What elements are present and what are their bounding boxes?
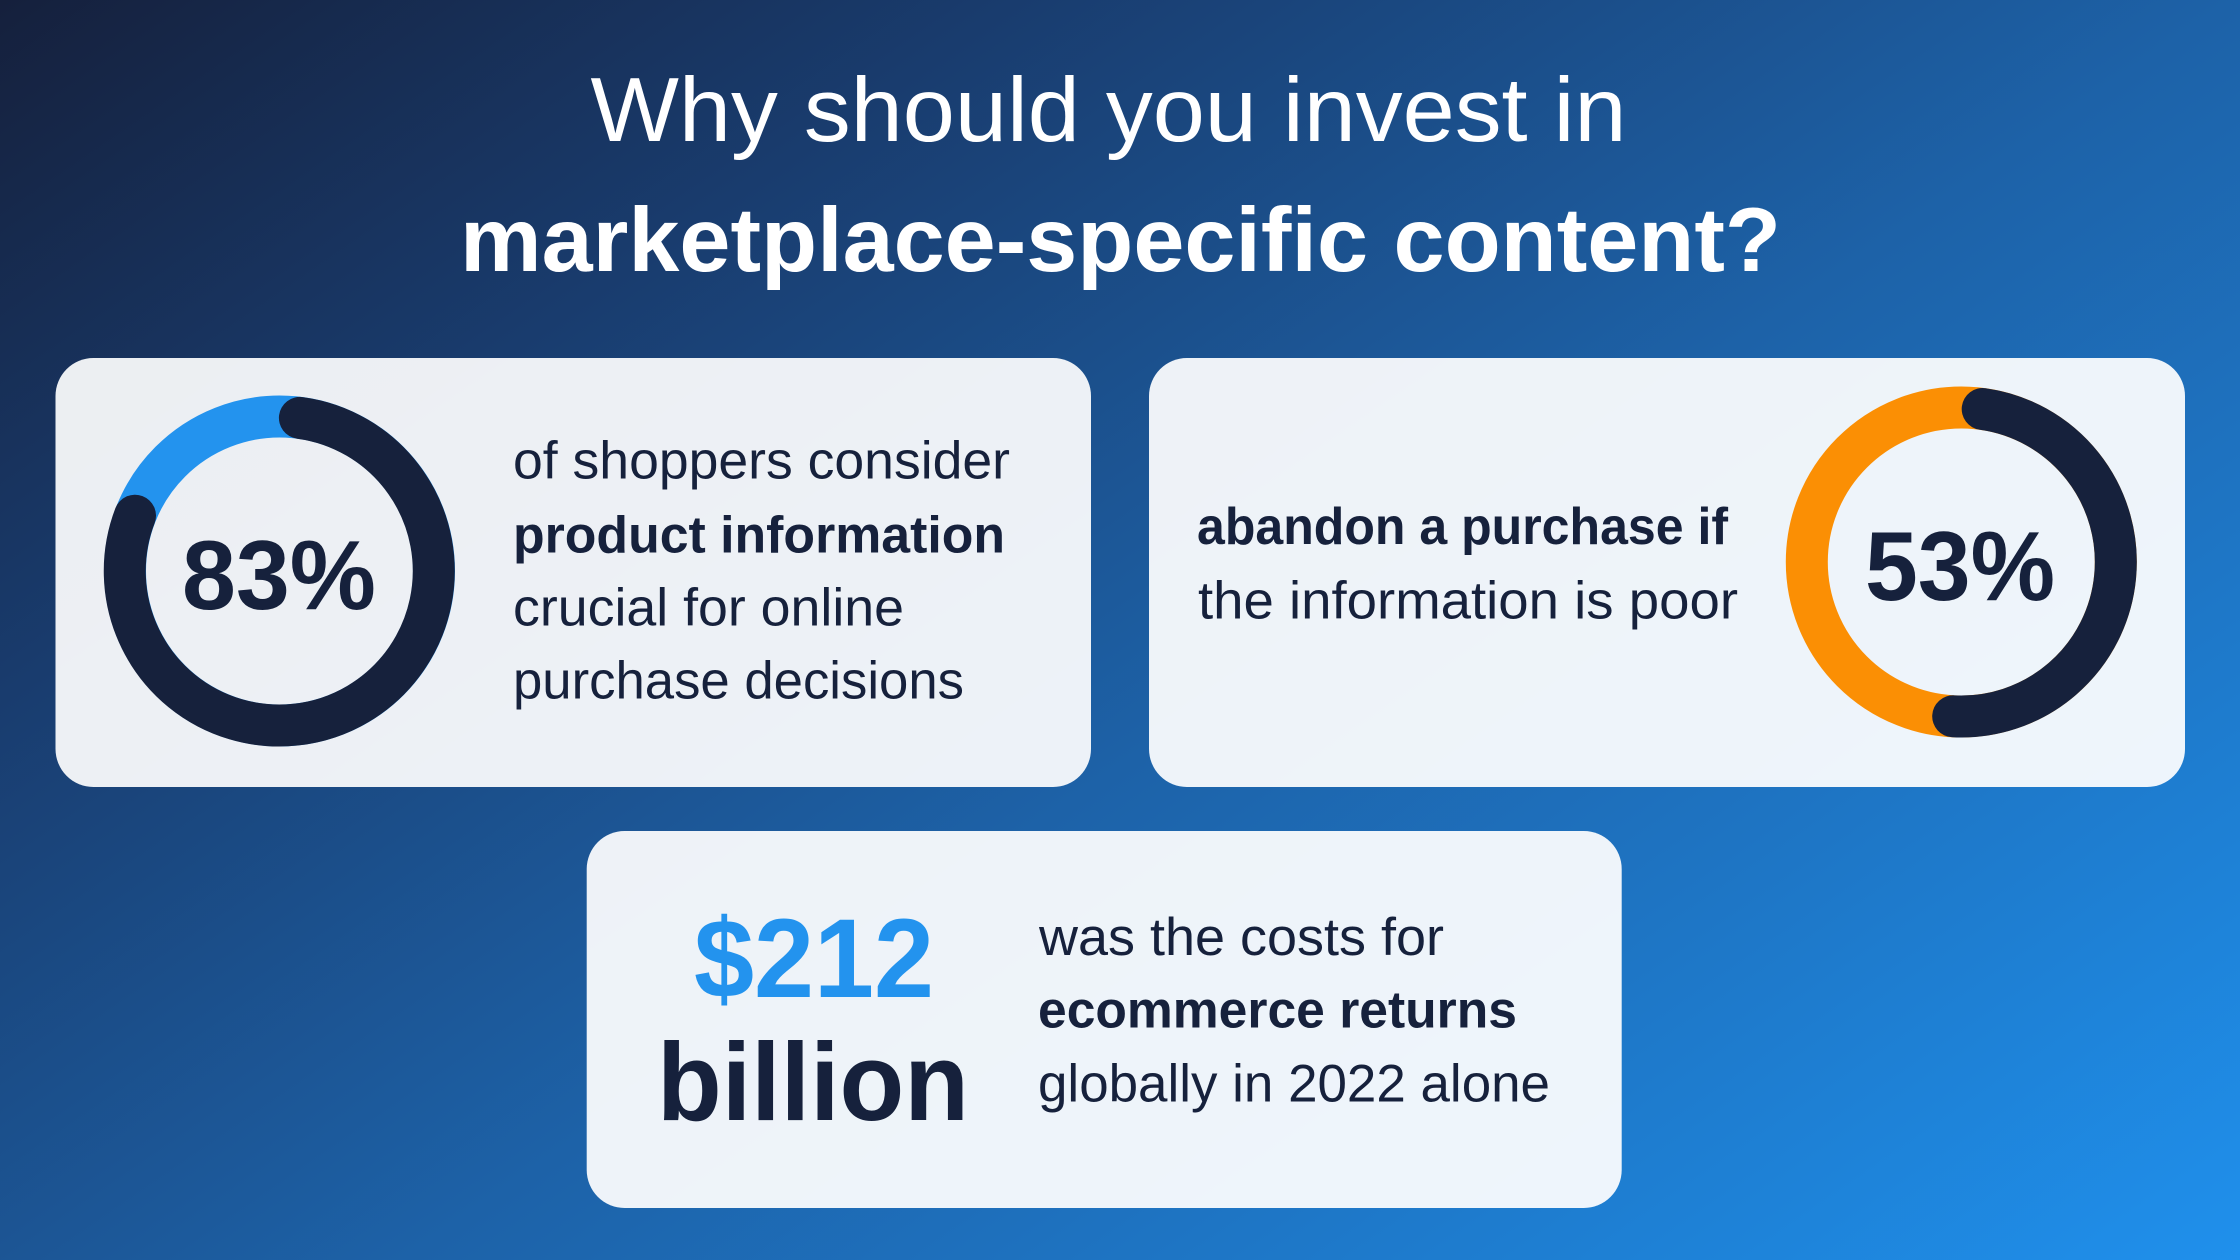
stat: $212: $212 xyxy=(694,896,934,1021)
stat: billion: billion xyxy=(657,1021,969,1144)
description text xyxy=(1197,498,1738,630)
card background xyxy=(56,358,1091,787)
card background xyxy=(587,831,1622,1208)
description text: was the costs for xyxy=(1038,908,1444,967)
card background xyxy=(1149,358,2185,787)
description text: of shoppers consider xyxy=(513,432,1010,490)
title line 2: marketplace-specific content? xyxy=(460,190,1781,291)
description text xyxy=(513,432,1010,710)
description text: crucial for online xyxy=(513,578,904,638)
panel: $212 billion statistic xyxy=(587,831,1622,1208)
stat: 53%: 53% xyxy=(1865,511,2055,621)
description text: the information is poor xyxy=(1198,572,1738,630)
description text: globally in 2022 alone xyxy=(1038,1054,1550,1113)
description text: abandon a purchase if xyxy=(1197,498,1729,556)
donut chart: 83% xyxy=(125,416,434,726)
panel: 53% statistic xyxy=(1149,358,2185,787)
description text: product information xyxy=(513,506,1005,564)
title xyxy=(460,60,1781,291)
donut chart: 53% xyxy=(1807,408,2116,717)
description text: purchase decisions xyxy=(513,652,964,710)
description text: ecommerce returns xyxy=(1038,982,1517,1040)
stat: 83%: 83% xyxy=(182,520,376,630)
title line 1: Why should you invest in xyxy=(590,60,1626,161)
description text xyxy=(1038,908,1550,1113)
panel: 83% statistic xyxy=(56,358,1091,787)
